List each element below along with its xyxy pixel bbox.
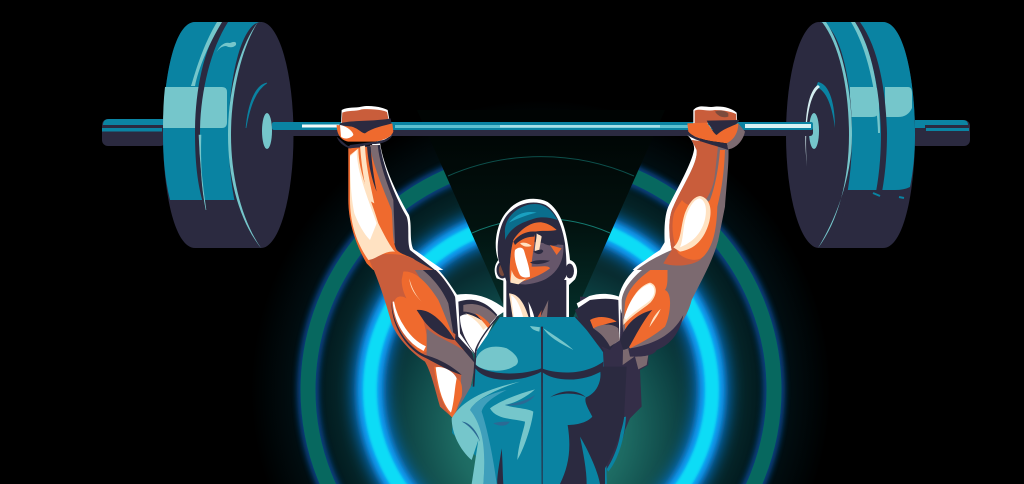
light band xyxy=(163,87,227,128)
cheek orange xyxy=(550,245,562,255)
left hand xyxy=(337,106,393,148)
left pec light xyxy=(475,347,518,371)
chest line xyxy=(474,362,603,380)
face orange xyxy=(510,222,557,283)
ears xyxy=(498,263,507,277)
left forearm xyxy=(348,135,443,270)
abdominal highlight xyxy=(490,389,535,460)
chin shadow xyxy=(508,258,566,290)
teal strand xyxy=(580,437,600,484)
barbell bar xyxy=(272,122,813,136)
concentric glow rings xyxy=(251,100,831,484)
plate highlight xyxy=(216,42,236,53)
barbell left plate xyxy=(102,22,294,248)
right shoulder xyxy=(575,294,621,350)
plate face xyxy=(786,22,852,248)
left upper arm xyxy=(372,247,475,418)
plate body xyxy=(820,22,915,248)
right bar stub xyxy=(910,120,970,146)
small marks xyxy=(873,193,880,196)
plate divider xyxy=(855,22,887,192)
hub xyxy=(809,113,819,149)
side panel light xyxy=(452,382,520,484)
center line xyxy=(541,327,543,484)
neck xyxy=(506,280,566,322)
athlete xyxy=(337,106,745,484)
hub arc xyxy=(246,83,267,128)
thin arcs in wedge xyxy=(448,157,634,233)
plate body xyxy=(163,22,262,248)
dark wedge behind head xyxy=(417,110,665,390)
left bar stub xyxy=(102,119,166,146)
cheek white xyxy=(515,248,530,277)
hub arcs xyxy=(816,82,835,128)
face base xyxy=(510,240,563,285)
plate face xyxy=(228,22,294,248)
torso upper detail xyxy=(473,316,604,484)
barbell right plate xyxy=(786,22,970,248)
right abdominal shadow xyxy=(550,367,627,484)
plate divider xyxy=(195,22,228,212)
left shoulder xyxy=(455,294,507,357)
right upper arm xyxy=(618,233,718,357)
brows and eyes xyxy=(513,231,536,245)
right hand xyxy=(687,106,745,150)
right pec sheen xyxy=(543,328,573,350)
mouth xyxy=(530,260,550,264)
right forearm xyxy=(633,135,729,270)
torso singlet xyxy=(452,316,627,484)
head xyxy=(495,199,577,322)
torso lower detail xyxy=(452,367,627,484)
torso edge lines xyxy=(473,316,499,387)
hair teal xyxy=(505,204,558,240)
hub xyxy=(262,113,272,149)
light bands xyxy=(850,87,879,117)
nose xyxy=(535,233,542,252)
white head outline xyxy=(495,199,577,318)
side panel mid tone xyxy=(468,390,507,484)
hair and head base xyxy=(498,202,566,287)
right lat shadow xyxy=(580,297,648,484)
